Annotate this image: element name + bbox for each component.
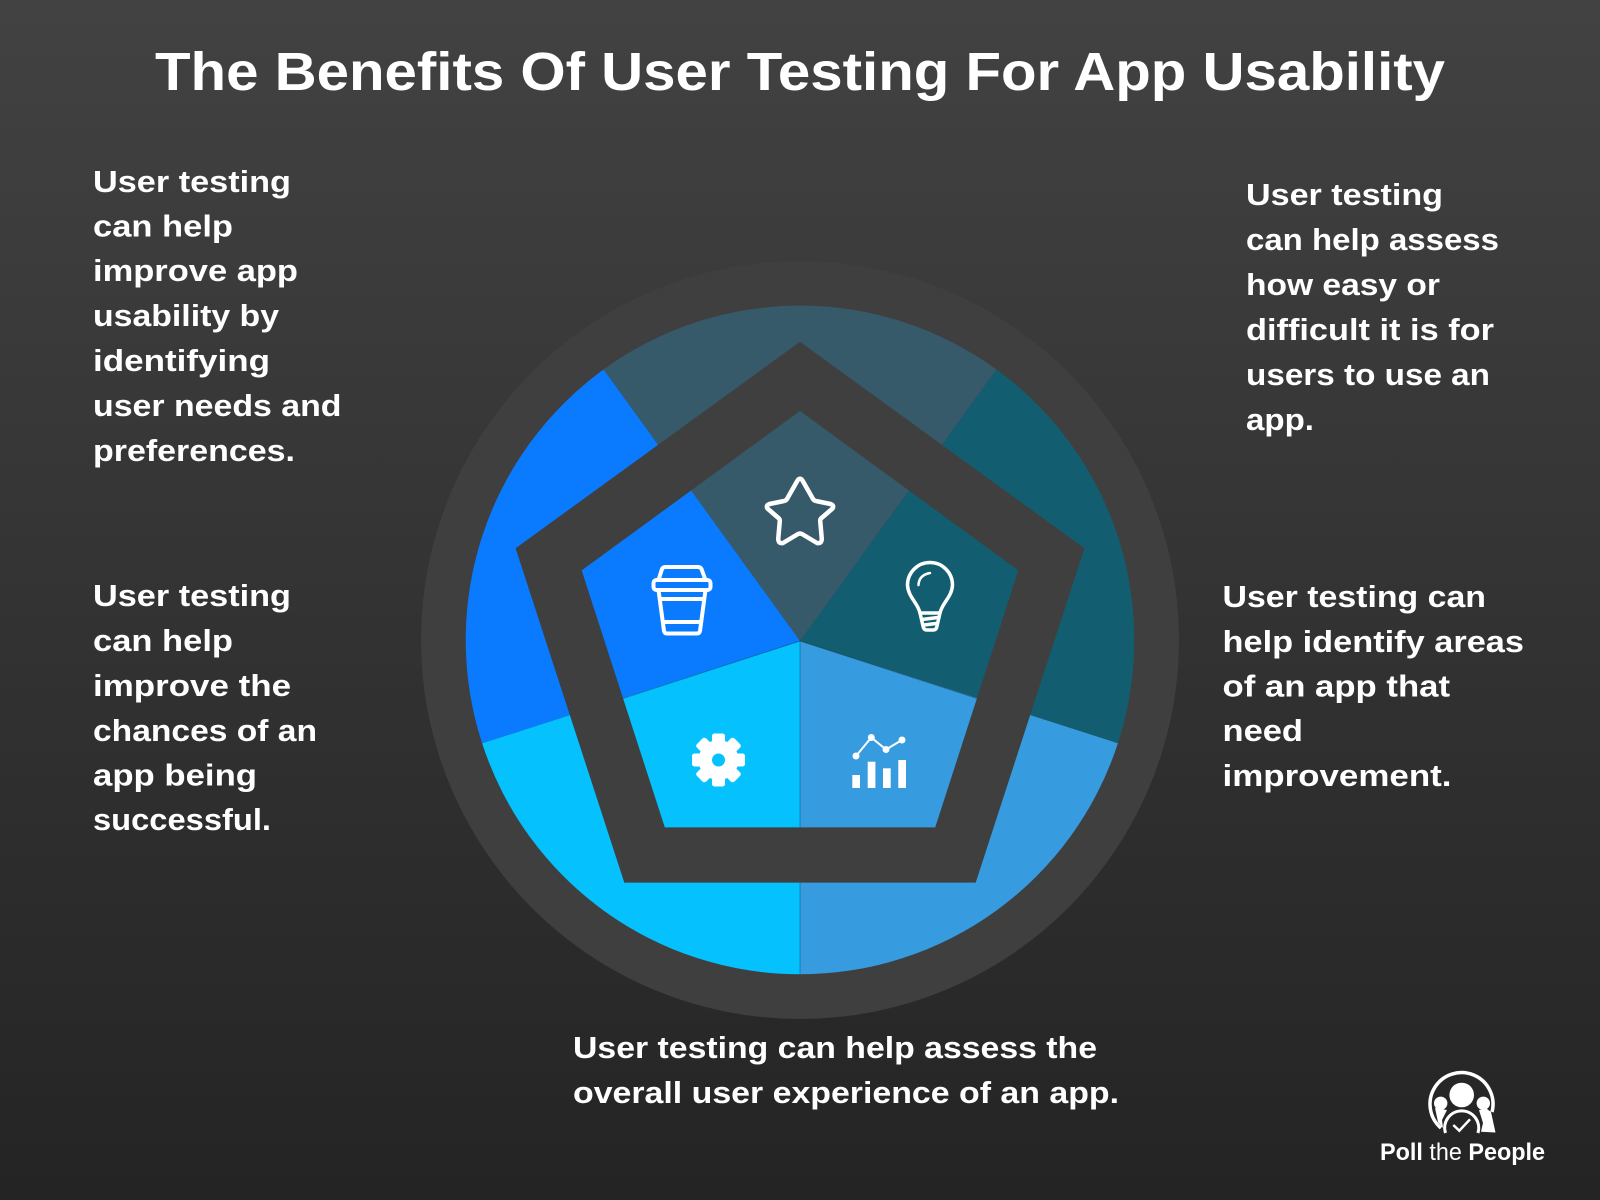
text block: chances of success: can help bbox=[93, 624, 233, 658]
text block: chances of success: app being bbox=[93, 758, 257, 792]
pentagon band bbox=[516, 342, 1084, 883]
icon: coffee cup bbox=[654, 567, 710, 634]
text block: overall experience bbox=[573, 1031, 1119, 1110]
logo: Poll the People bbox=[1380, 1073, 1545, 1166]
text block: identifying user needs: improve app bbox=[93, 254, 298, 288]
text block: ease of use: how easy or bbox=[1246, 268, 1440, 302]
divider lines bbox=[623, 641, 977, 974]
sector: bottom right bbox=[800, 641, 1118, 974]
icon: light bulb bbox=[908, 562, 952, 630]
text block: ease of use: difficult it is for bbox=[1246, 313, 1494, 347]
outer ring bbox=[421, 261, 1179, 1019]
sector: top bbox=[604, 306, 996, 641]
sector: left bbox=[466, 370, 800, 743]
text block: chances of success bbox=[93, 579, 317, 837]
text block: chances of success: successful. bbox=[93, 803, 271, 837]
sector: bottom left bbox=[482, 641, 800, 974]
text block: identifying user needs: can help bbox=[93, 210, 233, 244]
sector: right bbox=[800, 370, 1134, 743]
text block: chances of success: improve the bbox=[93, 669, 291, 703]
text block: identifying user needs: user needs and bbox=[93, 389, 342, 423]
text block: identifying user needs: preferences. bbox=[93, 434, 295, 468]
text block: ease of use: can help assess bbox=[1246, 223, 1499, 257]
text block: identifying user needs: User testing bbox=[93, 165, 291, 199]
text block: areas needing improvement bbox=[1222, 580, 1524, 793]
icon: bar and line chart bbox=[852, 734, 906, 788]
text block: ease of use: app. bbox=[1246, 403, 1314, 437]
text block: areas needing improvement: need bbox=[1222, 714, 1303, 748]
text block: areas needing improvement: help identify areas bbox=[1222, 625, 1524, 659]
title: The Benefits Of User Testing For App Usability bbox=[155, 42, 1445, 102]
text block: areas needing improvement: User testing can bbox=[1222, 580, 1486, 614]
text block: identifying user needs: usability by bbox=[93, 299, 279, 333]
text block: overall experience: overall user experience of an app. bbox=[573, 1076, 1119, 1110]
text block: identifying user needs: identifying bbox=[93, 344, 270, 378]
text block: areas needing improvement: improvement. bbox=[1222, 759, 1452, 793]
text block: chances of success: chances of an bbox=[93, 714, 317, 748]
text block: overall experience: User testing can help assess the bbox=[573, 1031, 1097, 1065]
text block: identifying user needs bbox=[93, 165, 342, 468]
icon: gear bbox=[692, 734, 745, 786]
pie chart sectors bbox=[466, 306, 1134, 974]
text block: ease of use: User testing bbox=[1246, 178, 1443, 212]
text block: ease of use bbox=[1246, 178, 1499, 437]
text block: ease of use: users to use an bbox=[1246, 358, 1490, 392]
text block: chances of success: User testing bbox=[93, 579, 291, 613]
icon: star bbox=[767, 479, 833, 543]
text block: areas needing improvement: of an app that bbox=[1222, 670, 1450, 704]
logo wordmark: Poll the People bbox=[1380, 1139, 1545, 1166]
logo mark bbox=[1430, 1073, 1496, 1133]
